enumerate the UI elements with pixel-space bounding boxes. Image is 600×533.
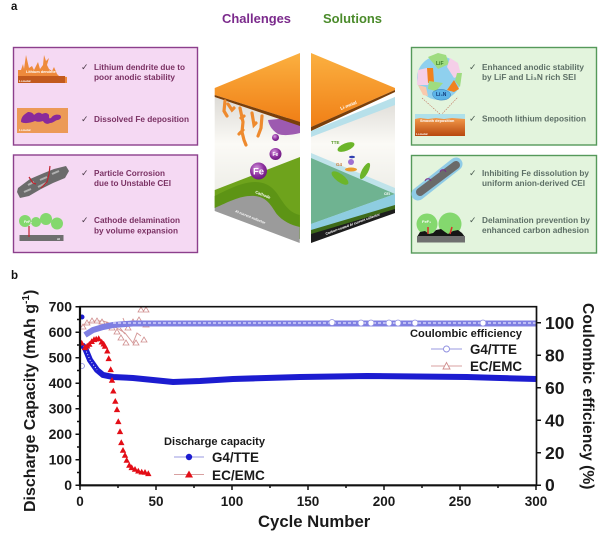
- text: Fe deposition: ✓: [81, 115, 89, 125]
- right axis tick labels: 0: [545, 475, 555, 495]
- icon: lithium dendrite: [18, 55, 67, 83]
- left axis tick labels: 300: [49, 400, 72, 416]
- diagram: solutions cell: [311, 53, 395, 243]
- legend: discharge capacity: EC/EMC: [212, 468, 265, 483]
- discharge capacity G4/TTE series: [80, 314, 536, 382]
- Fe ions: Fe: [253, 166, 264, 178]
- legend: coulombic efficiency: [410, 328, 522, 374]
- icon: carbon adhesion: [416, 212, 465, 242]
- legend: discharge capacity: [164, 436, 265, 483]
- panel: anode challenges: [14, 48, 198, 145]
- lithium metal top: [311, 53, 395, 131]
- legend: discharge capacity: G4/TTE: [212, 450, 259, 465]
- icon: anion-derived CEI particle: [418, 164, 456, 194]
- plot frame and axes: [76, 307, 541, 490]
- label b: b: [11, 270, 18, 282]
- icon: cathode delamination: Al: [57, 237, 60, 241]
- cathode layer with CEI: CEI: [384, 192, 390, 196]
- text: lithium dendrite: poor anodic stability: [94, 73, 176, 82]
- text: delamination prevention: ✓: [469, 216, 477, 226]
- left axis tick labels: 700: [49, 298, 72, 314]
- text: inhibiting Fe dissolution: ✓: [469, 169, 477, 179]
- left axis title: Discharge Capacity (mAh g: [22, 304, 39, 512]
- icon: cathode delamination: [19, 213, 64, 241]
- coulombic efficiency G4/TTE series: [80, 320, 536, 368]
- text: smooth deposition: ✓: [469, 114, 477, 124]
- right axis tick labels: [545, 313, 574, 495]
- text: cathode delamination: by volume expansion: [94, 226, 178, 236]
- left axis tick labels: 0: [64, 477, 72, 493]
- deposited Fe: [268, 117, 300, 135]
- text: particle corrosion: [81, 169, 171, 188]
- heading: Challenges: Challenges: [222, 12, 291, 26]
- right axis title: Coulombic efficiency (%): [579, 303, 596, 490]
- left axis tick labels: 200: [49, 426, 72, 442]
- label a: a: [11, 1, 18, 13]
- left axis tick labels: [49, 298, 72, 493]
- text: enhanced anodic stability: by LiF and Li₃N rich SEI: [482, 73, 576, 82]
- TTE and G4 molecules: TTE: [331, 140, 340, 145]
- left axis tick labels: 600: [49, 324, 72, 340]
- icon: LiF and Li3N SEI: LiF: [436, 61, 444, 67]
- text: enhanced anodic stability: ✓: [469, 63, 477, 73]
- text: cathode delamination: [81, 216, 180, 236]
- Fe ions: Fe: [272, 152, 279, 158]
- text: smooth deposition: Smooth lithium deposition: [482, 114, 586, 124]
- icon: Fe deposition: Li-metal: [19, 128, 31, 132]
- right axis tick labels: 80: [545, 346, 565, 366]
- cathode layer: [215, 157, 300, 243]
- text: lithium dendrite: [81, 63, 185, 82]
- text: inhibiting Fe dissolution: [469, 169, 590, 188]
- dashed zoom lines: [422, 97, 458, 115]
- heading: Solutions: Solutions: [323, 12, 382, 26]
- text: particle corrosion: ✓: [81, 169, 89, 179]
- SEI band: [311, 97, 395, 137]
- icon: smooth deposition: Li-metal: [416, 132, 428, 136]
- icon: particle corrosion: [17, 166, 69, 198]
- cathode layer with CEI: [311, 153, 395, 243]
- left axis title: ): [22, 290, 39, 295]
- panel: anode solutions: [412, 48, 596, 145]
- cathode layer: Cathode: [255, 189, 272, 200]
- x axis tick labels: 100: [221, 494, 243, 509]
- text: delamination prevention: Delamination prevention by: [482, 216, 591, 225]
- icon: lithium dendrite: Li-metal: [19, 79, 31, 83]
- chart: cycling performance: [21, 290, 596, 531]
- text: enhanced anodic stability: Enhanced anodic stability: [482, 63, 585, 72]
- icon: smooth deposition: Smooth deposition: [420, 119, 455, 123]
- icon: LiF and Li3N SEI: [417, 53, 462, 100]
- right axis tick labels: 40: [545, 410, 565, 430]
- text: delamination prevention: [469, 216, 591, 235]
- icon: carbon adhesion: FeF₃: [422, 219, 431, 224]
- icon: lithium dendrite: Lithium dendrite: [26, 70, 56, 74]
- left axis tick labels: 100: [49, 452, 72, 468]
- text: particle corrosion: Particle Corrosion: [94, 169, 165, 178]
- text: cathode delamination: Cathode delamination: [94, 216, 180, 225]
- x axis tick labels: [76, 494, 547, 509]
- x axis tick labels: 200: [373, 494, 395, 509]
- icon: cathode delamination: FeF₃: [24, 220, 32, 224]
- coulombic efficiency EC/EMC series: [81, 318, 141, 343]
- x axis tick labels: 250: [449, 494, 471, 509]
- x axis title: Cycle Number: [258, 512, 371, 531]
- discharge capacity EC/EMC series: [78, 335, 152, 476]
- TTE and G4 molecules: [330, 140, 372, 187]
- lithium dendrites: [224, 101, 262, 145]
- text: particle corrosion: due to Unstable CEI: [94, 179, 171, 188]
- icon: smooth deposition: [415, 114, 465, 136]
- text: enhanced anodic stability: [469, 63, 585, 82]
- panel: cathode challenges: [14, 155, 198, 252]
- cathode layer with CEI: Carbon-coated Al current collector: [325, 212, 381, 236]
- left axis tick labels: 500: [49, 350, 72, 366]
- text: inhibiting Fe dissolution: Inhibiting Fe dissolution by: [482, 169, 590, 178]
- icon: Fe deposition: [17, 108, 68, 133]
- legend: coulombic efficiency: EC/EMC: [470, 359, 522, 374]
- text: delamination prevention: enhanced carbon adhesion: [482, 226, 589, 235]
- text: inhibiting Fe dissolution: uniform anion-derived CEI: [482, 179, 585, 188]
- x axis tick labels: 50: [148, 494, 164, 509]
- legend: discharge capacity: Discharge capacity: [164, 436, 265, 448]
- Fe ions: [250, 134, 282, 180]
- text: lithium dendrite: ✓: [81, 63, 89, 73]
- lithium metal top: [215, 53, 300, 126]
- left axis title: -1: [21, 295, 32, 304]
- right axis tick labels: 60: [545, 378, 565, 398]
- icon: LiF and Li3N SEI: Li₃N: [436, 92, 447, 98]
- legend: coulombic efficiency: G4/TTE: [470, 342, 517, 357]
- left axis tick labels: 400: [49, 375, 72, 391]
- right axis tick labels: 20: [545, 443, 565, 463]
- cathode layer: Al current collector: [235, 209, 266, 225]
- text: Fe deposition: Dissolved Fe deposition: [94, 115, 189, 124]
- diagram: challenges cell: [215, 53, 300, 243]
- TTE and G4 molecules: G4: [336, 162, 343, 167]
- x axis tick labels: 0: [76, 494, 84, 509]
- x axis tick labels: 300: [525, 494, 547, 509]
- right axis tick labels: 100: [545, 313, 574, 333]
- panel: cathode solutions: [412, 156, 596, 253]
- lithium metal top: Li-metal: [340, 100, 357, 111]
- text: cathode delamination: ✓: [81, 216, 89, 226]
- legend: coulombic efficiency: Coulombic efficiency: [410, 328, 522, 340]
- text: lithium dendrite: Lithium dendrite due to: [94, 63, 185, 72]
- x axis tick labels: 150: [297, 494, 319, 509]
